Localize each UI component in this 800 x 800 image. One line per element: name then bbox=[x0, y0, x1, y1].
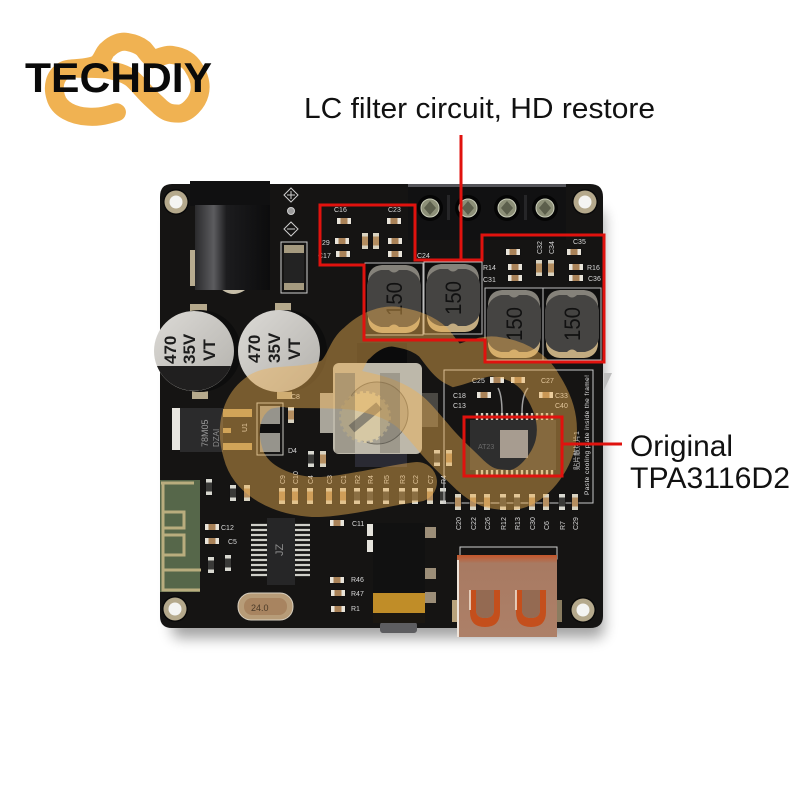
inductors 150: 150 bbox=[560, 307, 585, 341]
inductors 150: 150 bbox=[382, 282, 407, 316]
component row: C20 to C29: C29 bbox=[573, 517, 580, 530]
resistors by audio jack: C11 bbox=[352, 521, 364, 528]
amplifier silk frame: C18 bbox=[453, 393, 466, 400]
pcb base bbox=[160, 184, 603, 628]
amplifier silk frame: Paste cooling plate inside the frame! bbox=[584, 375, 591, 495]
component row: C9 to R4: C9 bbox=[280, 475, 287, 484]
component row: C9 to R4 bbox=[278, 471, 448, 505]
TPA3116D2 amplifier chip bbox=[470, 413, 556, 477]
leader line: chip bbox=[562, 442, 622, 446]
small SMD parts under regulator bbox=[206, 406, 452, 502]
red outline: chip bbox=[464, 417, 562, 476]
component row: C20 to C29: R13 bbox=[515, 517, 522, 530]
filter capacitors, left group: 29 bbox=[322, 240, 330, 247]
resistors by audio jack: R47 bbox=[351, 591, 364, 598]
small SMD parts by antenna: C12 bbox=[221, 525, 234, 532]
voltage regulator 78M05 bbox=[172, 408, 252, 452]
filter capacitors, right group bbox=[483, 239, 601, 284]
diode D4 bbox=[257, 394, 300, 455]
component row: C9 to R4: R4 bbox=[441, 475, 448, 484]
filter capacitors, left group: C17 bbox=[318, 253, 331, 260]
filter capacitors, right group: C35 bbox=[573, 239, 586, 246]
label: Original TPA3116D2: Original bbox=[630, 430, 733, 463]
filter capacitors, right group: C34 bbox=[549, 241, 556, 254]
crystal oscillator bbox=[238, 593, 293, 620]
component row: C9 to R4: C7 bbox=[428, 475, 435, 484]
watermark: grey letter fragments bbox=[335, 373, 612, 453]
component row: C20 to C29: C26 bbox=[485, 517, 492, 530]
heading: LC filter circuit, HD restore: LC filter circuit, HD restore bbox=[304, 93, 655, 125]
amplifier silk frame: C27 bbox=[541, 378, 554, 385]
resistors by audio jack: R1 bbox=[351, 606, 360, 613]
electrolytic capacitors 470 35V VT: VT bbox=[200, 339, 219, 361]
component row: C20 to C29: R7 bbox=[560, 521, 567, 530]
watermark: cloud swoosh bbox=[240, 327, 557, 497]
component row: C9 to R4: R3 bbox=[400, 475, 407, 484]
inductors 150: 150 bbox=[441, 281, 466, 315]
amplifier silk frame: C40 bbox=[555, 403, 568, 410]
mounting holes bbox=[162, 189, 598, 623]
small SMD parts by antenna bbox=[204, 524, 237, 574]
amplifier silk frame: C33 bbox=[555, 393, 568, 400]
amplifier silk frame bbox=[444, 370, 593, 503]
component row: C20 to C29: C6 bbox=[544, 521, 551, 530]
component row: C9 to R4: C1 bbox=[341, 475, 348, 484]
bluetooth IC JZ bbox=[251, 518, 310, 585]
filter capacitors, left group: C23 bbox=[388, 207, 401, 214]
board drop shadow bbox=[172, 210, 604, 638]
component row: C9 to R4: C10 bbox=[293, 471, 300, 484]
crystal oscillator: 24.0 bbox=[251, 603, 269, 613]
resistors by audio jack: R46 bbox=[351, 577, 364, 584]
component row: C20 to C29: C20 bbox=[456, 517, 463, 530]
electrolytic capacitors 470 35V VT: VT bbox=[285, 338, 304, 360]
filter capacitors, left group: C16 bbox=[334, 207, 347, 214]
component row: C9 to R4: R2 bbox=[355, 475, 362, 484]
electrolytic capacitors 470 35V VT: 35V bbox=[265, 332, 284, 363]
filter capacitors, right group: R14 bbox=[483, 265, 496, 272]
amplifier silk frame: C25 bbox=[472, 378, 485, 385]
SMD diode bbox=[281, 242, 307, 293]
component row: C20 to C29: R12 bbox=[501, 517, 508, 530]
red outline: LC filter zone bbox=[320, 205, 604, 362]
bluetooth IC JZ: JZ bbox=[274, 544, 286, 556]
diode D4: D4 bbox=[288, 448, 297, 455]
filter capacitors, right group: R16 bbox=[587, 265, 600, 272]
circuit board photo bbox=[154, 181, 603, 637]
component row: C9 to R4: R4 bbox=[368, 475, 375, 484]
3.5mm audio jack bbox=[367, 523, 436, 633]
diode D4: C8 bbox=[291, 394, 300, 401]
DC power jack bbox=[190, 181, 270, 294]
filter capacitors, right group: C32 bbox=[537, 241, 544, 254]
component row: C9 to R4: C3 bbox=[327, 475, 334, 484]
voltage regulator 78M05: DZAI bbox=[212, 429, 221, 447]
TPA3116D2 amplifier chip: AT23 bbox=[478, 444, 494, 451]
electrolytic capacitors 470 35V VT bbox=[154, 303, 327, 399]
polarity marks bbox=[284, 188, 298, 236]
resistors by audio jack bbox=[329, 520, 364, 613]
inductors 150: 150 bbox=[502, 307, 527, 341]
voltage regulator 78M05: 78M05 bbox=[200, 419, 210, 447]
component row: C9 to R4: R5 bbox=[384, 475, 391, 484]
component row: C20 to C29: C30 bbox=[530, 517, 537, 530]
small SMD parts by antenna: C5 bbox=[228, 539, 237, 546]
filter capacitors, left group: C24 bbox=[417, 253, 430, 260]
component row: C20 to C29 bbox=[454, 493, 580, 530]
amplifier silk frame: C13 bbox=[453, 403, 466, 410]
electrolytic capacitors 470 35V VT: 470 bbox=[161, 336, 180, 364]
bluetooth antenna bbox=[160, 480, 201, 592]
filter capacitors, right group: C31 bbox=[483, 277, 496, 284]
logo: TECHDIY bbox=[25, 42, 212, 117]
component row: C9 to R4: C2 bbox=[413, 475, 420, 484]
filter capacitors, left group bbox=[318, 207, 430, 260]
component row: C9 to R4: C4 bbox=[308, 475, 315, 484]
electrolytic capacitors 470 35V VT: 470 bbox=[245, 335, 264, 363]
logo: TECHDIY: TECHDIY bbox=[25, 54, 212, 101]
electrolytic capacitors 470 35V VT: 35V bbox=[180, 333, 199, 364]
screw terminal block bbox=[408, 184, 566, 240]
amplifier silk frame: 贴片散热片1 bbox=[572, 431, 581, 470]
potentiometer bbox=[320, 343, 438, 467]
USB socket bbox=[452, 547, 562, 637]
leader line: LC filter bbox=[460, 135, 462, 260]
component row: C20 to C29: C22 bbox=[471, 517, 478, 530]
voltage regulator 78M05: U1 bbox=[242, 423, 249, 432]
inductors 150 bbox=[365, 262, 601, 360]
filter capacitors, right group: C36 bbox=[588, 276, 601, 283]
label: Original TPA3116D2: TPA3116D2 bbox=[630, 462, 790, 495]
